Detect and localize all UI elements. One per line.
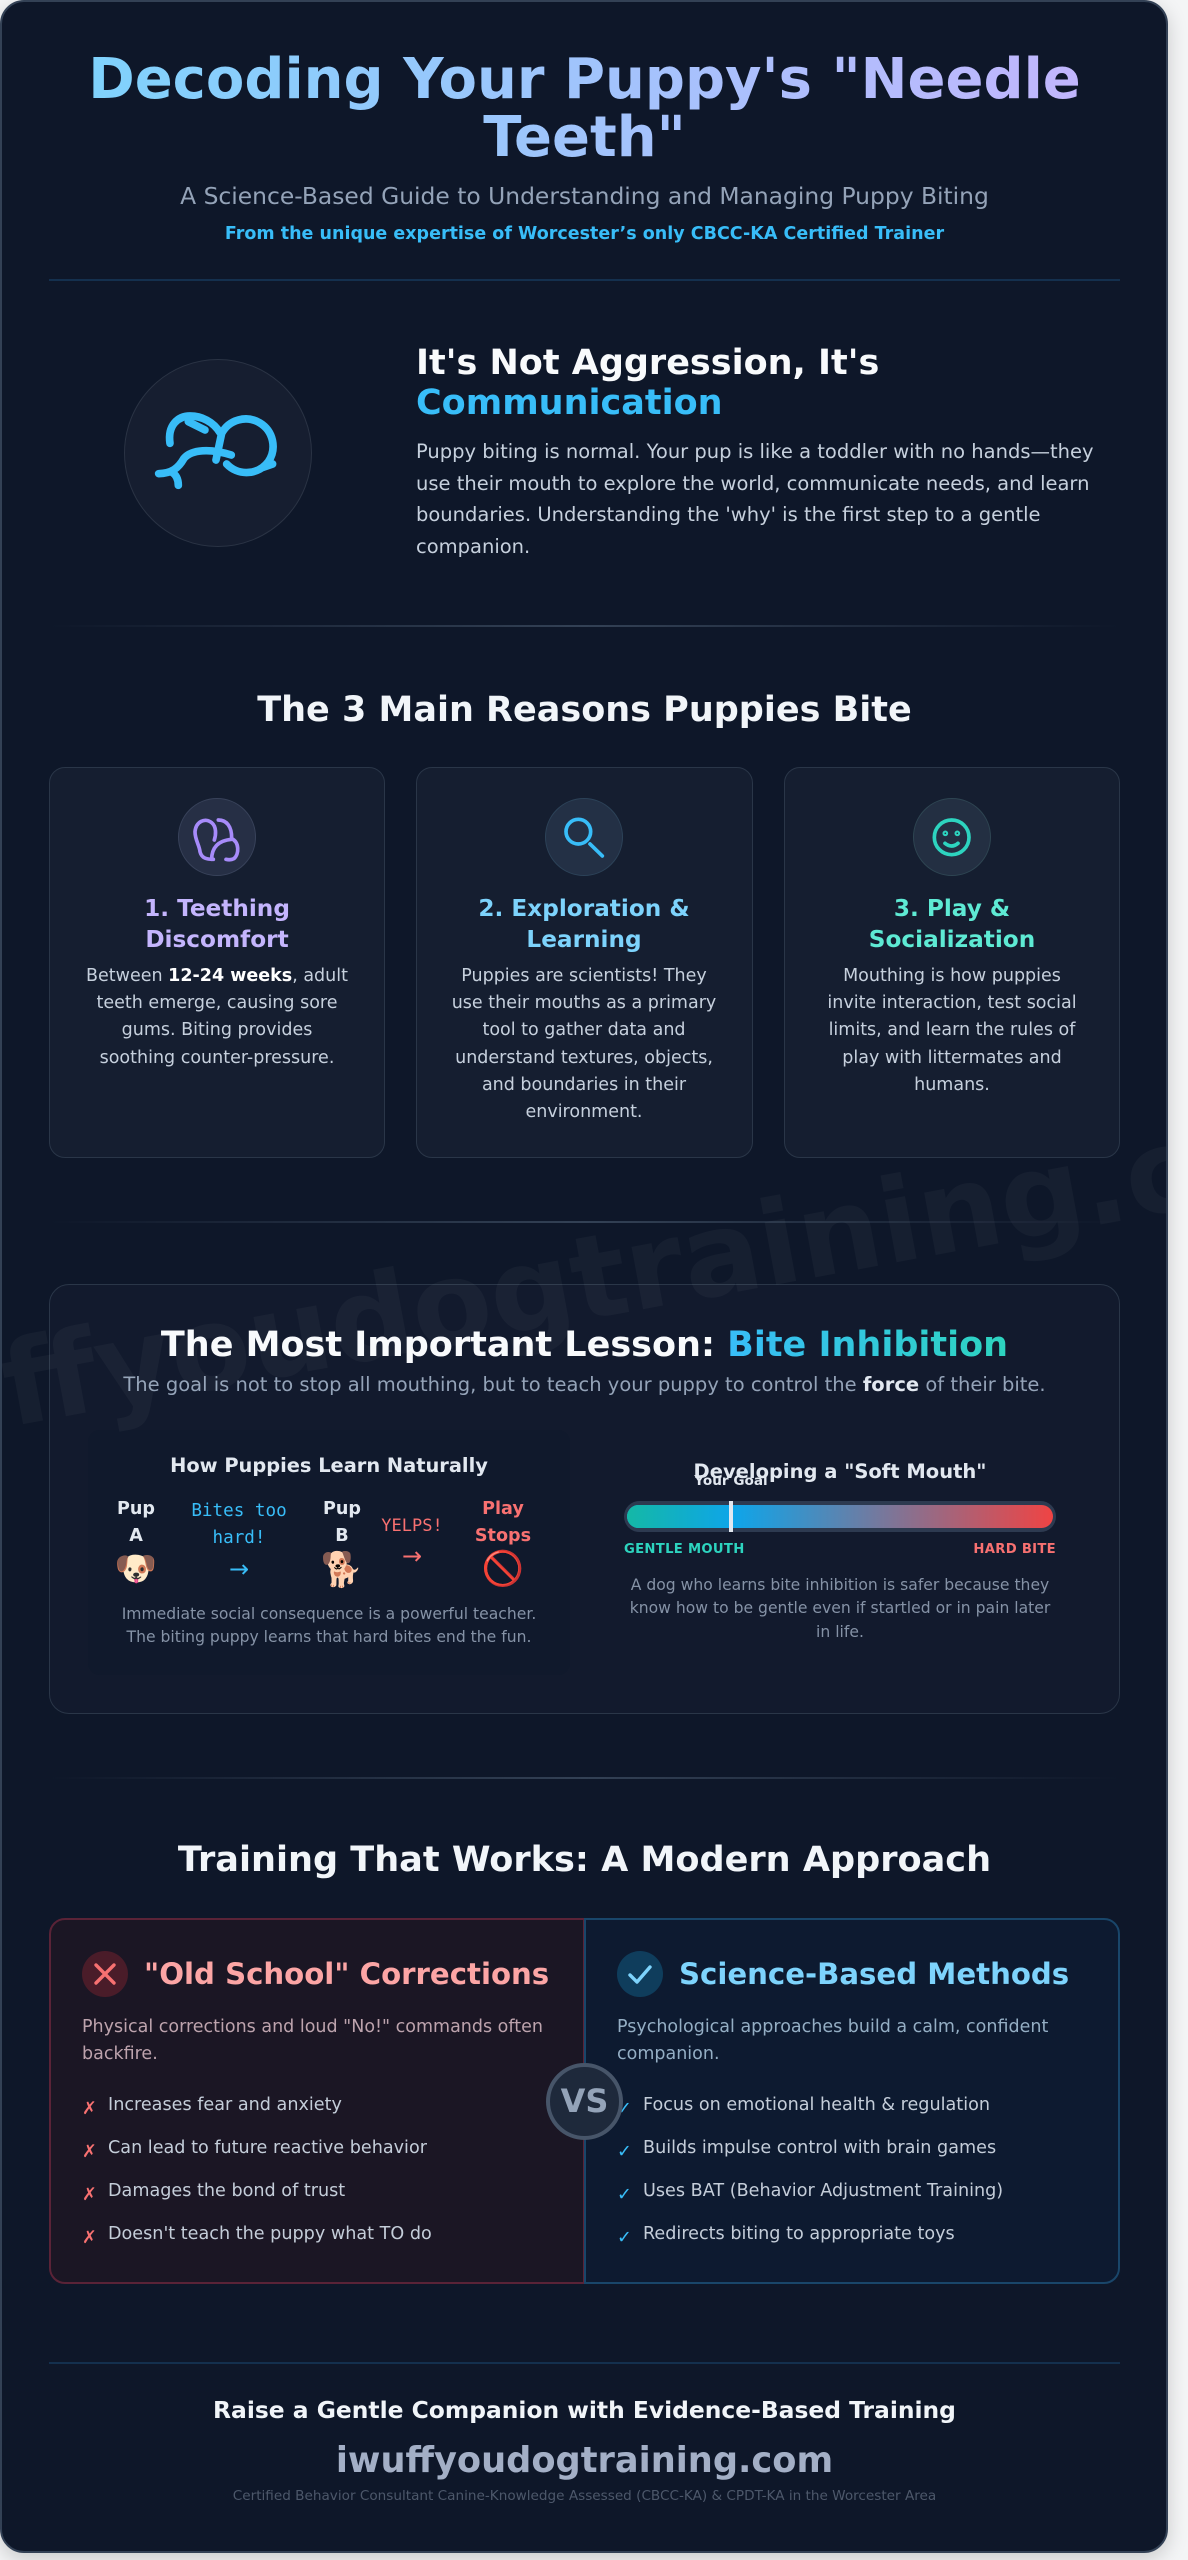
- step: play stops: Stops: [475, 1526, 531, 1546]
- column heading: Science-Based Methods: [679, 1957, 1069, 1991]
- icon: magnifier: [545, 798, 623, 876]
- step: yelps: →: [402, 1542, 422, 1570]
- icon: check: [617, 1951, 663, 1997]
- step: yelps: YELPS!: [381, 1516, 443, 1536]
- list: Redirects biting to appropriate toys: [643, 2224, 955, 2244]
- note: [630, 1576, 1050, 1641]
- caption: Immediate social consequence is a powerful teacher.: [122, 1605, 536, 1623]
- VS badge: [546, 2063, 623, 2140]
- card text: play: Mouthing is how puppies: [843, 966, 1061, 986]
- column intro: [82, 2017, 543, 2064]
- comparison: science based: [584, 1918, 1120, 2284]
- list: Can lead to future reactive behavior: [108, 2138, 427, 2158]
- card text: teething: [86, 966, 348, 1068]
- step: bites too hard: Bites too: [191, 1501, 287, 1521]
- column intro: Physical corrections and loud "No!" commands often: [82, 2017, 543, 2037]
- column intro: companion.: [617, 2044, 720, 2064]
- note: in life.: [816, 1623, 864, 1641]
- caption: [122, 1605, 536, 1646]
- step: pup B: B: [335, 1526, 349, 1546]
- card text: play: play with littermates and: [842, 1048, 1062, 1068]
- card title: play: Socialization: [869, 926, 1035, 953]
- card: teething: [49, 767, 385, 1158]
- sub-heading: How Puppies Learn Naturally: [170, 1454, 488, 1477]
- panel: how puppies learn: [88, 1430, 570, 1675]
- intro heading: [416, 343, 879, 423]
- intro heading: Communication: [416, 383, 723, 423]
- icon: teeth: [178, 798, 256, 876]
- chart: soft mouth scale: [624, 1460, 1056, 1641]
- icon: cross: [82, 1951, 128, 1997]
- footer website: iwuffyoudogtraining.com: [336, 2440, 833, 2481]
- card text: teething: teeth emerge, causing sore: [97, 993, 337, 1013]
- card title: play: 3. Play &: [894, 895, 1010, 922]
- list: [82, 2095, 432, 2248]
- list: ✓: [617, 2142, 632, 2162]
- note: A dog who learns bite inhibition is safer because they: [631, 1576, 1049, 1594]
- label: hard: HARD BITE: [973, 1542, 1056, 1557]
- panel heading: The Most Important Lesson: Bite Inhibition: [161, 1325, 1008, 1365]
- list: ✓: [617, 2099, 632, 2119]
- emoji: puppy face: 🐶: [115, 1549, 157, 1589]
- card title: exploration: [478, 895, 690, 953]
- column intro: backfire.: [82, 2044, 158, 2064]
- step: play stops: [475, 1499, 531, 1546]
- intro paragraph: [416, 440, 1094, 558]
- card title: exploration: 2. Exploration &: [478, 895, 690, 922]
- list: ✗: [82, 2142, 97, 2162]
- step: pup A: A: [129, 1526, 143, 1546]
- card text: exploration: [452, 966, 716, 1122]
- marker label: Your Goal: [694, 1473, 768, 1489]
- VS badge: VS: [561, 2082, 608, 2120]
- card text: exploration: tool to gather data and: [482, 1020, 686, 1040]
- sub-heading: Developing a "Soft Mouth": [694, 1460, 986, 1483]
- footer headline: Raise a Gentle Companion with Evidence-Based Training: [213, 2396, 956, 2424]
- list: Doesn't teach the puppy what TO do: [108, 2224, 432, 2244]
- card title: exploration: Learning: [526, 926, 642, 953]
- step: pup A: [117, 1499, 155, 1546]
- label: gentle: GENTLE MOUTH: [624, 1542, 745, 1557]
- card text: exploration: understand textures, objects,: [455, 1048, 713, 1068]
- card text: teething: gums. Biting provides: [122, 1020, 312, 1040]
- intro paragraph: boundaries. Understanding the 'why' is the first step to a gentle: [416, 503, 1041, 526]
- marker: [729, 1501, 733, 1532]
- step: yelps: [381, 1516, 443, 1570]
- gradient bar: [624, 1501, 1056, 1532]
- list: ✓: [617, 2185, 632, 2205]
- card title: teething: Discomfort: [145, 926, 289, 953]
- list: ✗: [82, 2185, 97, 2205]
- list: ✗: [82, 2228, 97, 2248]
- subtitle: A Science-Based Guide to Understanding and Managing Puppy Biting: [180, 182, 989, 210]
- caption: The biting puppy learns that hard bites end the fun.: [127, 1628, 531, 1646]
- list: Damages the bond of trust: [108, 2181, 345, 2201]
- card text: exploration: environment.: [525, 1102, 642, 1122]
- step: bites too hard: [191, 1501, 287, 1583]
- intro paragraph: use their mouth to explore the world, communicate needs, and learn: [416, 472, 1089, 495]
- column intro: Psychological approaches build a calm, confident: [617, 2017, 1048, 2037]
- panel: bite inhibition: [49, 1284, 1120, 1714]
- step: bites too hard: hard!: [213, 1528, 265, 1548]
- card: play: [784, 767, 1120, 1158]
- step: play stops: Play: [482, 1499, 524, 1519]
- step: pup B: [323, 1499, 361, 1546]
- card text: teething: soothing counter-pressure.: [100, 1048, 334, 1068]
- intro paragraph: companion.: [416, 535, 530, 558]
- card: exploration: [416, 767, 753, 1158]
- list: Focus on emotional health & regulation: [643, 2095, 990, 2115]
- card text: teething: Between 12-24 weeks, adult: [86, 966, 348, 986]
- intro heading: It's Not Aggression, It's: [416, 343, 879, 383]
- card text: play: [827, 966, 1077, 1095]
- intro section: [124, 343, 1094, 558]
- card text: play: invite interaction, test social: [827, 993, 1077, 1013]
- icon: smiley: [913, 798, 991, 876]
- column heading: "Old School" Corrections: [144, 1957, 549, 1991]
- list: [617, 2095, 1003, 2248]
- card text: play: limits, and learn the rules of: [829, 1020, 1075, 1040]
- list: Uses BAT (Behavior Adjustment Training): [643, 2181, 1003, 2201]
- step: pup A: Pup: [117, 1499, 155, 1519]
- step: pup B: Pup: [323, 1499, 361, 1519]
- list: ✓: [617, 2228, 632, 2248]
- emoji: no sign: 🚫: [482, 1549, 524, 1589]
- card title: play: [869, 895, 1035, 953]
- icon: communication: [124, 359, 312, 547]
- intro paragraph: Puppy biting is normal. Your pup is like a toddler with no hands—they: [416, 440, 1094, 463]
- card text: exploration: use their mouths as a primary: [452, 993, 716, 1013]
- card title: teething: [144, 895, 290, 953]
- panel subtitle: The goal is not to stop all mouthing, but to teach your puppy to control the force of their bite.: [123, 1373, 1046, 1396]
- comparison: old school: [49, 1918, 585, 2284]
- tagline: From the unique expertise of Worcester’s only CBCC-KA Certified Trainer: [225, 224, 944, 244]
- heading: training: Training That Works: A Modern Approach: [178, 1839, 991, 1880]
- title: Decoding Your Puppy's "Needle Teeth": [88, 47, 1081, 170]
- card text: exploration: and boundaries in their: [482, 1075, 686, 1095]
- heading: reasons: The 3 Main Reasons Puppies Bite: [257, 690, 912, 730]
- list: ✗: [82, 2099, 97, 2119]
- list: Builds impulse control with brain games: [643, 2138, 996, 2158]
- note: know how to be gentle even if startled or in pain later: [630, 1599, 1050, 1617]
- card text: exploration: Puppies are scientists! They: [461, 966, 707, 986]
- card text: play: humans.: [914, 1075, 990, 1095]
- list: Increases fear and anxiety: [108, 2095, 342, 2115]
- card title: teething: 1. Teething: [144, 895, 290, 922]
- column intro: [617, 2017, 1048, 2064]
- step: bites too hard: →: [229, 1555, 249, 1583]
- emoji: dog: 🐕: [321, 1550, 363, 1590]
- footer credentials: Certified Behavior Consultant Canine-Knowledge Assessed (CBCC-KA) & CPDT-KA in the Worcester Area: [233, 2488, 936, 2504]
